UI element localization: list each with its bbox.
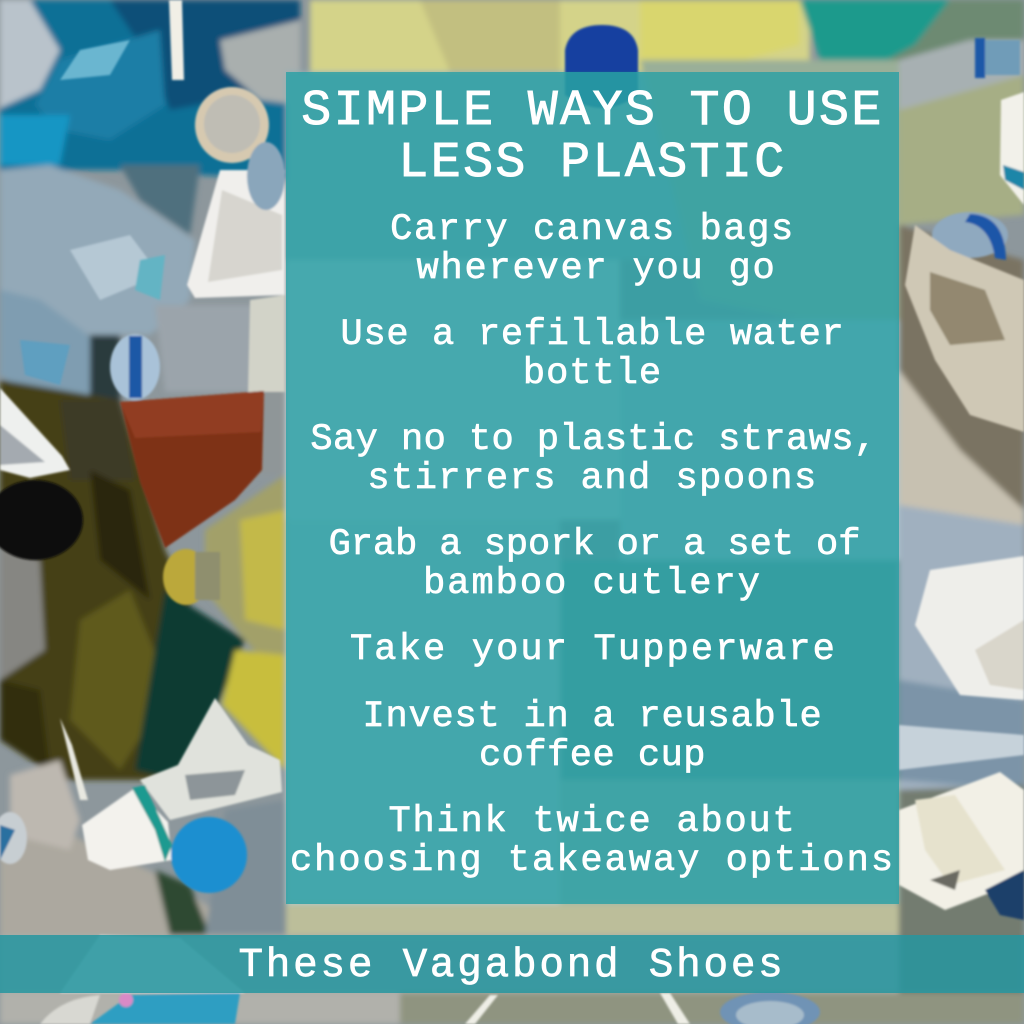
panel: tips list	[286, 72, 899, 904]
tie	[60, 718, 88, 800]
blue cap top	[565, 25, 638, 72]
tip 2: Use a refillable water	[341, 314, 844, 356]
tip 2	[341, 314, 844, 395]
terracotta pot	[120, 391, 264, 548]
tip 1	[390, 209, 795, 290]
tip 1: wherever you go	[416, 248, 777, 290]
right side items	[1000, 92, 1024, 205]
tip 3	[310, 419, 877, 500]
yellow bottle neck	[163, 549, 209, 605]
straw	[169, 0, 184, 80]
bottle at bottom left	[0, 812, 27, 864]
black bottle neck	[0, 480, 83, 560]
tip 6: coffee cup	[479, 735, 706, 777]
bottle neck	[247, 142, 285, 210]
tip 4: Grab a spork or a set of	[329, 524, 860, 566]
beige lid	[195, 87, 269, 163]
blue cap	[171, 817, 247, 893]
tip 7: Think twice about	[388, 801, 797, 843]
plastic highlights	[60, 40, 130, 80]
bottom strip items	[90, 993, 240, 1024]
heading: title: LESS PLASTIC	[398, 135, 787, 192]
tip 3: stirrers and spoons	[367, 458, 818, 500]
tip 4	[329, 524, 860, 605]
footer text: brand: These Vagabond Shoes	[238, 943, 786, 989]
tip 1: Carry canvas bags	[390, 209, 795, 251]
heading: title: SIMPLE WAYS TO USE	[301, 83, 884, 140]
newspaper	[140, 698, 282, 820]
heading: title	[301, 83, 884, 192]
tip 3: Say no to plastic straws,	[310, 419, 877, 461]
tip 4: bamboo cutlery	[423, 563, 762, 605]
card	[248, 295, 285, 392]
tip 6	[362, 696, 823, 777]
tip 2: bottle	[523, 353, 662, 395]
tip 6: Invest in a reusable	[362, 696, 823, 738]
footer band	[0, 935, 1024, 993]
white neck	[82, 788, 172, 870]
tip 5: Take your Tupperware	[350, 629, 837, 671]
white tub	[187, 170, 285, 298]
tip 7: choosing takeaway options	[290, 840, 895, 882]
white fragment	[0, 388, 70, 478]
tip 7	[290, 801, 895, 882]
